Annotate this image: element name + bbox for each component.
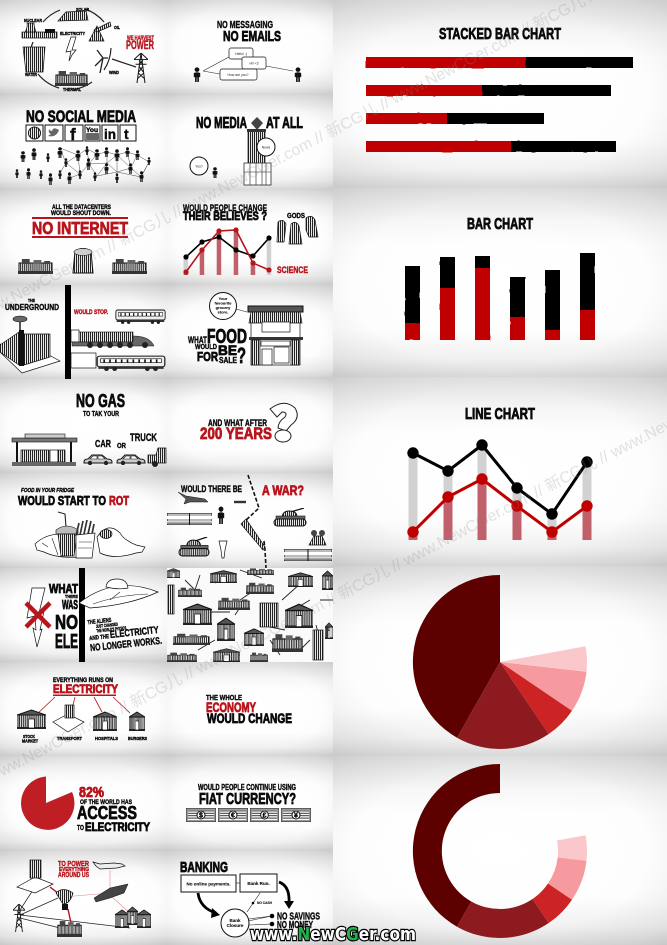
text: 82% access to electricity: ACCESS	[77, 802, 137, 823]
panel: after 200 years	[167, 379, 333, 473]
heading: what food would be for sale: WHAT	[188, 335, 207, 345]
icon: satellite	[94, 884, 128, 902]
heading: no gas	[76, 391, 125, 418]
callout: grocery store: Your	[219, 296, 228, 301]
icon: jet	[178, 492, 208, 504]
heading: no social media: NO SOCIAL MEDIA	[26, 108, 136, 126]
callout: news: News	[262, 146, 271, 150]
icon: question mark	[270, 403, 297, 442]
speech bubbles: Hello! :)	[235, 52, 247, 56]
icon: banknotes: $	[199, 812, 203, 820]
heading: what food would be for sale: WOULD	[195, 344, 217, 351]
heading: no gas: TO TAK YOUR	[83, 411, 119, 418]
icon: water dam	[23, 47, 45, 72]
panel: no electricity	[0, 568, 167, 662]
heading: no messaging no emails	[217, 20, 281, 45]
heading: what food would be for sale: BE	[218, 342, 237, 358]
category labels: TRANSPORT	[57, 736, 82, 741]
icon: goblet	[219, 541, 227, 558]
callout: you	[190, 157, 208, 175]
icon: trains	[71, 310, 165, 371]
line chart	[407, 439, 593, 540]
icon: lightning bolt	[66, 37, 76, 61]
social media icons: You	[86, 127, 98, 134]
text: 82% access to electricity: ELECTRICITY	[85, 822, 150, 834]
social media icons: in	[104, 126, 116, 142]
heading: to power everything around us: TO POWER	[58, 859, 89, 868]
panel: economy	[167, 662, 333, 756]
icon: missile	[234, 501, 246, 503]
category labels: HOSPITALS	[95, 736, 118, 741]
icon: oil pump	[89, 22, 111, 41]
stacked bars	[366, 57, 633, 152]
heading: and what after 200 years	[200, 418, 272, 443]
icon: plane	[93, 862, 125, 869]
connection lines	[185, 570, 333, 655]
speech bubbles: How are you?	[228, 73, 249, 77]
icon: gas station	[12, 434, 77, 466]
heading: food in your fridge: WOULD START TO	[18, 493, 106, 508]
heading: and what after 200 years: 200 YEARS	[200, 424, 272, 443]
icon: media tower	[244, 117, 271, 185]
divider bar	[65, 285, 71, 379]
panel: everything runs on electricity	[0, 662, 167, 756]
heading: fiat currency: FIAT CURRENCY?	[199, 791, 296, 808]
callout: you: You?	[195, 164, 203, 168]
icon: nuclear plant	[22, 23, 57, 38]
panel: underground	[0, 285, 167, 379]
icon: transport	[53, 705, 84, 732]
box: bank run	[240, 874, 277, 892]
icon: walls	[167, 513, 332, 561]
text: 82% access to electricity: TO	[77, 825, 84, 832]
speech bubbles: Hi! <3	[250, 62, 259, 66]
labels: car or truck	[95, 432, 157, 450]
heading: would there be a war: WOULD THERE BE	[181, 484, 242, 495]
heading: everything runs on electricity: ELECTRICITY	[53, 682, 118, 696]
callout: bank closure	[221, 909, 249, 937]
labels: car or truck: OR	[117, 443, 126, 450]
icon: crossed lightning bolt	[26, 588, 50, 647]
dashed border line	[244, 475, 266, 568]
label: gods: GODS	[287, 211, 305, 220]
text: aliens: THE ALIENS	[87, 618, 112, 626]
buildings cluster	[167, 568, 333, 662]
callout: grocery store: grocery	[216, 305, 231, 310]
callout: grocery store	[210, 292, 247, 320]
social media icons	[26, 125, 136, 144]
callout: grocery store: store.	[218, 310, 228, 314]
panel: stacked bar chart	[333, 0, 667, 188]
icon: pylon	[13, 904, 25, 932]
icon: thermal plant	[55, 71, 88, 86]
heading: what if there was no electricity: NO	[55, 612, 78, 634]
outcomes: no savings no money	[248, 912, 320, 931]
heading: fiat currency: WOULD PEOPLE CONTINUE USING	[198, 783, 296, 792]
donut chart	[413, 764, 587, 938]
icon: underground station	[0, 316, 60, 373]
heading: to power everything around us: EVERYTHING	[59, 867, 89, 873]
connector	[236, 882, 240, 884]
labels: car or truck: TRUCK	[130, 432, 157, 444]
heading: everything runs on electricity: EVERYTHING RUNS ON	[53, 677, 113, 684]
panel: banking	[167, 851, 333, 945]
heading: what if there was no electricity: THERE	[65, 594, 78, 599]
text: 82% access to electricity: 82%	[79, 785, 104, 801]
energy labels: WATER	[25, 72, 38, 77]
heading: would people change their believes	[183, 203, 267, 223]
icon: hospitals	[93, 712, 117, 731]
network lines	[20, 870, 132, 928]
icon: pylon	[134, 53, 148, 83]
heading: banking: BANKING	[180, 860, 228, 876]
heading: fiat currency	[198, 783, 296, 808]
panel: donut chart	[333, 756, 667, 945]
heading: no gas: NO GAS	[76, 391, 125, 411]
panel: fiat currency	[167, 756, 333, 851]
text: 82% access to electricity	[77, 785, 150, 834]
heading: stacked bar chart: STACKED BAR CHART	[439, 26, 561, 43]
icon: banknotes: £	[263, 812, 267, 820]
heading: would people change their believes: THEIR BELIEVES ?	[183, 209, 267, 223]
icon: border wall	[241, 519, 265, 550]
heading: what if there was no electricity: WAS	[62, 598, 78, 612]
outcomes: no savings no money: NO SAVINGS	[277, 912, 320, 922]
divider bar	[79, 568, 85, 662]
heading: the whole economy would change	[206, 693, 292, 726]
heading: no internet: NO INTERNET	[32, 218, 128, 238]
icon: two people	[194, 67, 301, 82]
network lines	[60, 148, 149, 178]
box: bank run: Bank Run.	[247, 881, 270, 886]
panel: power network	[0, 851, 167, 945]
energy labels: OIL	[114, 25, 120, 30]
icon: wind turbine	[95, 50, 108, 73]
energy labels: ELECTRICITY	[60, 31, 85, 36]
panel: no social media	[0, 95, 167, 190]
heading: to power everything around us: AROUND US	[58, 872, 89, 879]
panel: no gas	[0, 379, 167, 473]
social media icons: t	[124, 126, 129, 142]
heading: what food would be for sale: SALE	[219, 356, 238, 365]
logo: www.NewCGer.com: www.NewCGer.com	[250, 924, 416, 945]
icon: banknotes	[186, 808, 311, 822]
heading: food in your fridge: FOOD IN YOUR FRIDGE	[21, 488, 74, 494]
heading: food in your fridge: ROT	[109, 493, 129, 508]
box: no online payments	[181, 875, 236, 892]
icon: stock market	[17, 710, 46, 729]
callout: grocery store: favourite	[215, 300, 232, 306]
heading: the whole economy would change: WOULD CHANGE	[207, 711, 292, 726]
callout: news	[257, 138, 275, 156]
icon: transport hub	[17, 860, 53, 893]
heading: all the datacenters: WOULD SHOUT DOWN.	[51, 210, 111, 217]
callout: bank closure: Closure	[227, 923, 244, 928]
energy labels: NUCLEAR	[24, 18, 43, 23]
pie chart	[413, 575, 587, 749]
label: no cash: NO CASH	[257, 900, 272, 905]
heading: what if there was no electricity	[49, 582, 78, 653]
heading: we harvest power	[126, 35, 154, 52]
panel: beliefs	[167, 190, 333, 285]
icon: factory	[57, 921, 82, 937]
callout: bank closure: Bank	[229, 918, 241, 923]
text: aliens: JUST CHANGED	[96, 622, 119, 629]
icon: solar panels	[58, 11, 88, 21]
icon: cars and truck	[84, 448, 166, 467]
heading: no messaging no emails: NO MESSAGING	[217, 20, 273, 31]
heading: we harvest power: POWER	[126, 40, 154, 52]
icon: burgers	[129, 712, 145, 731]
energy labels: THERMAL	[63, 87, 81, 92]
icon: grocery store	[248, 306, 303, 365]
heading: no messaging no emails: NO EMAILS	[223, 28, 281, 45]
energy labels	[24, 7, 120, 92]
connector lines	[36, 697, 130, 715]
panel: 82 percent	[0, 756, 167, 851]
heading: no media at all: AT ALL	[266, 115, 303, 132]
icon: datacenters	[18, 248, 147, 274]
label: science: SCIENCE	[277, 265, 308, 276]
icon: gods group	[309, 530, 326, 545]
category labels: MARKET	[22, 738, 38, 744]
icon: gods figures	[277, 216, 318, 244]
heading: the underground: THE	[28, 298, 35, 303]
energy labels: WIND	[109, 70, 120, 75]
panel: no messaging	[167, 0, 333, 95]
box: no online payments: No online payments.	[186, 882, 231, 886]
panel: power sources	[0, 0, 167, 95]
arrow: to bank closure	[198, 893, 220, 918]
heading: what if there was no electricity: ELE	[55, 631, 78, 653]
heading: what food would be for sale: ?	[237, 343, 246, 368]
icon: tanks	[179, 508, 306, 556]
panel: no media	[167, 95, 333, 190]
heading: the underground	[5, 298, 59, 312]
vertical bars	[405, 253, 595, 340]
heading: what if there was no electricity: WHAT	[49, 582, 78, 596]
heading: line chart: LINE CHART	[465, 406, 535, 423]
panel: a war	[167, 473, 333, 568]
heading: the whole economy would change: ECONOMY	[206, 700, 256, 715]
heading: to power everything around us	[58, 859, 89, 879]
heading: the whole economy would change: THE WHOLE	[206, 693, 242, 702]
icon: ufo	[79, 579, 158, 608]
panel: bar chart	[333, 188, 667, 377]
text: aliens: AND THE	[89, 634, 109, 642]
energy cycle ring	[31, 9, 111, 89]
icon: soldier	[218, 506, 224, 524]
text: aliens: THE WORLD'S PHYSICS	[96, 625, 127, 633]
text: aliens: NO LONGER WORKS.	[90, 636, 163, 654]
heading: and what after 200 years: AND WHAT AFTER	[208, 418, 267, 429]
heading: we harvest power: WE HARVEST	[127, 35, 154, 42]
category labels: STOCK	[23, 734, 36, 739]
message lines	[203, 57, 293, 74]
outcomes: no savings no money: NO MONEY	[277, 920, 313, 931]
heading: what food would be for sale: FOOD	[207, 326, 247, 348]
category labels	[22, 734, 147, 744]
category labels: BURGERS	[128, 736, 147, 741]
heading: all the datacenters	[51, 204, 112, 217]
heading: would people change their believes: WOULD PEOPLE CHANGE	[183, 203, 267, 214]
label: no cash	[247, 893, 272, 912]
heading: no media at all: NO MEDIA	[196, 115, 247, 132]
panel: line chart	[333, 377, 667, 566]
heading: everything runs on electricity	[53, 677, 118, 696]
heading: the underground: UNDERGROUND	[5, 302, 59, 312]
text: aliens	[87, 613, 163, 654]
heading: would there be a war: A WAR?	[262, 482, 304, 498]
panel: no internet	[0, 190, 167, 285]
icon: city group	[115, 907, 151, 928]
icon: food pile	[35, 512, 145, 558]
labels: car or truck: CAR	[95, 438, 111, 450]
heading: all the datacenters: ALL THE DATACENTERS	[52, 204, 112, 211]
text: 82% access to electricity: OF THE WORLD HAS	[80, 799, 133, 806]
text: would stop: WOULD STOP.	[74, 309, 108, 316]
social media icons: f	[70, 125, 76, 144]
heading: bar chart: BAR CHART	[467, 216, 533, 233]
arrow: to no savings	[279, 882, 294, 909]
icon: person	[213, 167, 217, 178]
heading: would there be a war	[181, 482, 304, 498]
energy labels: SOLAR	[76, 7, 90, 12]
heading: what food would be for sale	[188, 326, 247, 368]
icon: satellite dish	[56, 890, 73, 910]
line chart: beliefs vs science	[183, 227, 272, 275]
heading: what food would be for sale: FOR	[197, 350, 218, 364]
panel: food rot	[0, 473, 167, 568]
pie chart: 82%	[21, 776, 74, 830]
icon: banknotes: €	[231, 812, 235, 820]
panel: what food	[167, 285, 333, 379]
text: aliens: ELECTRICITY	[109, 625, 160, 641]
panel: pie chart	[333, 566, 667, 756]
speech bubbles	[220, 48, 266, 80]
panel: city buildings network	[167, 568, 333, 662]
people crowd	[15, 146, 151, 185]
icon: banknotes: ¥	[294, 812, 298, 820]
power line	[112, 59, 136, 67]
